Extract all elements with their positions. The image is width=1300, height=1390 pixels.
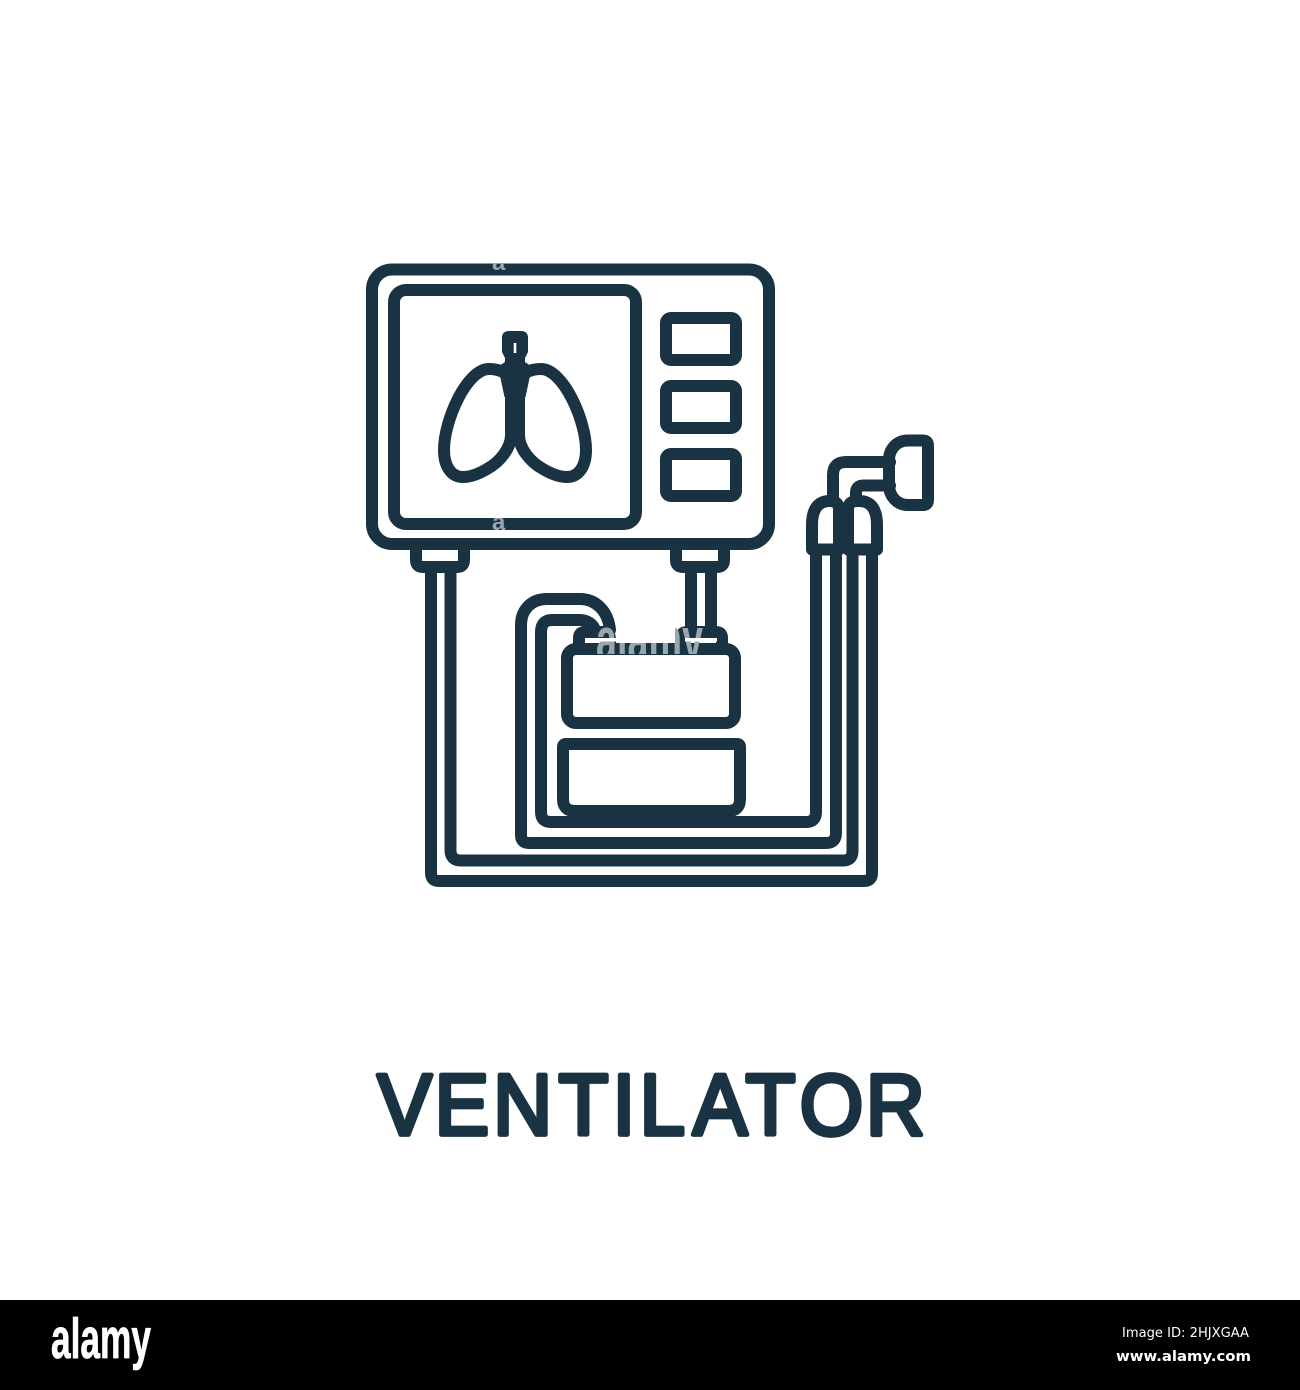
- upper humidifier box: [567, 649, 735, 723]
- monitor housing: [372, 270, 769, 544]
- watermark: alamy on connectors: alamy: [596, 606, 703, 673]
- right valve connector: [681, 632, 722, 648]
- connector pipes between monitor and humidifier: [691, 570, 711, 632]
- hose: outer left: [431, 552, 872, 881]
- breathing tubes: [833, 462, 890, 497]
- watermark fragment: top of housing: a: [492, 249, 506, 276]
- watermark fragment: bottom of screen: a: [492, 509, 506, 536]
- patient circuit cuffs: [812, 501, 877, 550]
- title: VENTILATOR: [377, 1056, 925, 1153]
- icon: ventilator: [372, 270, 928, 881]
- hose: inner arched: [541, 552, 816, 822]
- left valve connector: [579, 632, 610, 648]
- white highlight lines on connectors: [585, 638, 717, 642]
- icon: lungs: [444, 331, 586, 477]
- control buttons: [666, 318, 736, 496]
- hose: inner left: [450, 552, 852, 860]
- logo: alamy: alamy: [51, 1307, 151, 1371]
- image id: Image ID: 2HJXGAA: [1122, 1326, 1249, 1341]
- monitor screen: [394, 290, 636, 524]
- face mask: [889, 440, 928, 505]
- footer band: [0, 1300, 1300, 1390]
- website: www.alamy.com: [1116, 1349, 1251, 1365]
- lower humidifier box: [563, 744, 740, 811]
- hose: arched: [521, 552, 836, 843]
- monitor feet: [416, 546, 724, 567]
